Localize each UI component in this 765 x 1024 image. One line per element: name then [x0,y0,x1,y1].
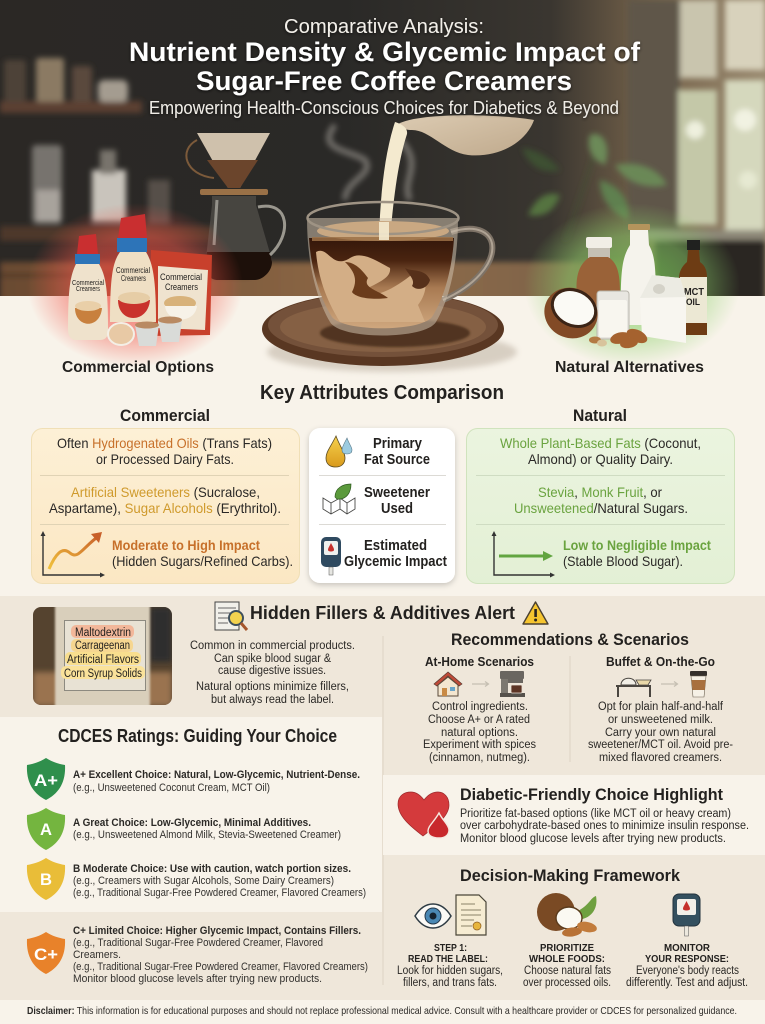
panel: commercial attributes [32,428,300,584]
bag [151,250,212,336]
cream floor below hero [0,296,765,386]
natural alternative products [536,224,707,349]
lower section background [0,596,765,1000]
heading: CDCES ratings: CDCES Ratings: Guiding Your Choice [58,726,337,746]
rating: C+: (e.g., Traditional Sugar-Free Powdered Creamer, Flavored Creamers) [73,961,368,973]
icon: sugar cubes and leaf [323,484,355,514]
step: prioritize whole foods: WHOLE FOODS: [529,953,605,965]
heading: key attributes comparison: Key Attributes Comparison [260,382,504,404]
panel: commercial attributes: Often Hydrogenated Oils (Trans Fats) [57,435,272,451]
scenario: buffet and on-the-go [588,655,733,764]
alert explanation text [190,640,355,706]
dripper and carafe [186,133,285,280]
icon: warning triangle [523,602,548,624]
panel: commercial attributes: Artificial Sweeteners (Sucralose, [71,484,260,500]
MCT oil bottle: OIL [686,297,700,307]
hero photo: coffee kitchen scene [0,0,765,302]
rating: A: A [40,820,52,839]
milk glass [597,291,629,339]
small bottle: Commercial [72,278,104,287]
step: read the label: fillers, and trans fats. [403,977,497,989]
panel: decision-making framework [397,866,748,989]
small bottle [68,234,108,340]
MCT oil bottle [679,240,707,335]
icon: coconut and almonds [537,893,598,938]
icon: fat drops [326,436,352,467]
panel: attribute labels [309,428,455,583]
panel: diabetic-friendly choice highlight: Monitor blood glucose levels after trying new products. [460,833,726,845]
panel: attribute labels: Fat Source [364,452,430,468]
step: monitor your response: YOUR RESPONSE: [645,953,729,965]
milk carton [640,275,686,343]
milk bottle [621,224,656,325]
panel: commercial attributes: Aspartame), Sugar Alcohols (Erythritol). [49,500,281,516]
scenario: buffet and on-the-go: Buffet & On-the-Go [606,655,715,669]
scenario: at-home: natural options. [441,727,518,739]
coconut bottle [576,237,620,335]
scenario: at-home: Experiment with spices [423,739,536,751]
icon: takeaway cup [690,671,707,697]
rating: C+ [27,925,368,985]
panel: CDCES ratings [0,717,382,912]
glow: natural products [524,203,740,367]
rating: C+: Creamers. [73,949,121,961]
title block: Nutrient Density & Glycemic Impact of [129,37,641,67]
column heading: natural: Natural [573,407,627,425]
rating: A+: (e.g., Unsweetened Coconut Cream, MCT Oil) [73,782,270,794]
steam [329,125,412,200]
MCT oil bottle: MCT [684,287,704,298]
panel: attribute labels: Primary [373,436,422,452]
scenario: buffet and on-the-go: mixed flavored creamers. [599,752,722,764]
step: read the label: STEP 1: [434,942,467,954]
chart: rising glycemic impact [40,531,105,578]
step: read the label: Look for hidden sugars, [397,965,503,977]
photo: ingredient label on bottle: Corn Syrup Solids [64,668,142,680]
panel: commercial attributes: Moderate to High Impact [112,537,260,553]
plant [522,134,667,240]
rating: B [27,858,366,900]
icon: glucose meter [321,537,341,575]
title block: Empowering Health-Conscious Choices for Diabetics & Beyond [149,98,619,118]
step: read the label [397,895,503,989]
glow: commercial products [27,203,243,367]
panel: natural attributes [466,428,734,584]
step: prioritize whole foods: Choose natural fats [524,965,611,977]
icon: buffet table [616,678,651,697]
panel: commercial attributes: or Processed Dairy Fats. [96,451,234,467]
step: monitor your response: differently. Test and adjust. [626,977,748,989]
alert explanation text: Natural options minimize fillers, [196,681,349,693]
large bottle: Commercial [116,266,150,275]
rating: A+ [27,758,360,800]
step: prioritize whole foods: PRIORITIZE [540,942,594,954]
scenario: buffet and on-the-go: sweetener/MCT oil. Avoid pre- [588,739,733,751]
almonds [589,326,650,349]
rating: B: (e.g., Traditional Sugar-Free Powdered Creamer, Flavored Creamers) [73,887,366,899]
photo: ingredient label on bottle: Artificial Flavors [67,654,139,666]
scenario: at-home: At-Home Scenarios [425,655,534,669]
scenario: at-home [423,655,536,764]
coffee cup on wooden saucer [262,202,517,372]
panel: attribute labels: Used [381,501,413,517]
icon: coffee machine [500,671,525,697]
panel: commercial attributes: (Hidden Sugars/Refined Carbs). [112,553,293,569]
rating: A: (e.g., Unsweetened Almond Milk, Stevia-Sweetened Creamer) [73,829,341,841]
arrow [472,682,488,686]
step: monitor your response: Everyone's body reacts [636,965,739,977]
title block: Sugar-Free Coffee Creamers [196,66,572,96]
rating: B: B Moderate Choice: Use with caution, watch portion sizes. [73,863,351,875]
small bottle: Creamers [76,284,100,293]
halved coconut [536,279,606,347]
disclaimer bar [0,1000,765,1024]
scenario: at-home: (cinnamon, nutmeg). [429,752,530,764]
alert explanation text: cause digestive issues. [218,665,326,677]
step: monitor your response: MONITOR [664,942,710,954]
scenario: buffet and on-the-go: or unsweetened milk. [608,714,713,726]
panel: diabetic-friendly choice highlight: Diabetic-Friendly Choice Highlight [460,785,723,804]
bag: Creamers [165,282,198,292]
icon: glucose meter [673,894,700,936]
alert explanation text: but always read the label. [211,694,334,706]
rating: A+: A+ Excellent Choice: Natural, Low-Glycemic, Nutrient-Dense. [73,769,360,781]
panel: hidden fillers and additives alert: Hidden Fillers & Additives Alert [250,602,515,623]
large bottle: Creamers [121,274,146,283]
step: prioritize whole foods: over processed oils. [523,977,611,989]
arrow [661,682,678,686]
rating: C+: C+ [34,945,58,964]
panel: natural attributes: (Stable Blood Sugar). [563,553,683,569]
panel: attribute labels: Glycemic Impact [344,554,447,570]
step: prioritize whole foods [523,893,611,989]
column heading: commercial: Commercial [120,407,210,425]
photo: ingredient label on bottle [33,607,172,705]
rating: C+: (e.g., Traditional Sugar-Free Powdered Creamer, Flavored [73,937,323,949]
step: read the label: READ THE LABEL: [408,953,488,965]
scenario: buffet and on-the-go: Carry your own natural [605,727,716,739]
title block [129,16,641,118]
label: natural alternatives: Natural Alternatives [555,359,704,376]
rating: C+: Monitor blood glucose levels after trying new products. [73,973,322,985]
step: monitor your response [626,894,748,989]
panel: recommendations and scenarios: Recommendations & Scenarios [451,631,689,649]
panel: natural attributes: Stevia, Monk Fruit, or [538,484,662,500]
creamer pods [108,316,182,346]
large bottle [110,214,156,322]
panel: diabetic-friendly choice highlight: over carbohydrate-based ones to minimize insulin response. [460,820,749,832]
rating: C+: C+ Limited Choice: Higher Glycemic Impact, Contains Fillers. [73,925,361,937]
panel: hidden fillers and additives alert [33,600,548,710]
icon: eye and document [415,895,486,935]
scenario: at-home: Choose A+ or A rated [428,714,530,726]
scenario: at-home: Control ingredients. [432,701,528,713]
rating: A [27,808,341,850]
rating: A+: A+ [34,771,58,790]
panel: attribute labels: Estimated [364,538,427,554]
panel: decision-making framework: Decision-Making Framework [460,866,681,885]
pitcher and milk stream [379,115,534,240]
panel: natural attributes: Low to Negligible Impact [563,537,711,553]
commercial creamer products [68,214,212,346]
icon: document with magnifier [215,602,247,630]
panel: natural attributes: Almond) or Quality Dairy. [528,451,673,467]
bag: Commercial [160,272,202,282]
panel: recommendations and scenarios [423,631,733,764]
rating: B: B [40,870,52,889]
chart: stable glycemic impact [492,531,555,578]
label: commercial options: Commercial Options [62,359,214,376]
photo: ingredient label on bottle: Carrageenan [75,640,130,652]
title block: Comparative Analysis: [284,16,484,38]
panel: diabetic-friendly choice highlight [383,775,765,855]
alert explanation text: Common in commercial products. [190,640,355,652]
panel: natural attributes: Unsweetened/Natural Sugars. [514,500,688,516]
icon: house [434,672,462,696]
photo: ingredient label on bottle: Maltodextrin [75,627,131,639]
icon: heart and blood drop [398,792,449,838]
panel: attribute labels: Sweetener [364,485,430,501]
panel: diabetic-friendly choice highlight: Prioritize fat-based options (like MCT oil or heavy cream) [460,808,731,820]
scenario: buffet and on-the-go: Opt for plain half-and-half [598,701,724,713]
alert explanation text: Can spike blood sugar & [214,653,331,665]
panel: natural attributes: Whole Plant-Based Fats (Coconut, [500,435,701,451]
rating: B: (e.g., Creamers with Sugar Alcohols, Some Dairy Creamers) [73,875,334,887]
rating: A: A Great Choice: Low-Glycemic, Minimal Additives. [73,817,311,829]
